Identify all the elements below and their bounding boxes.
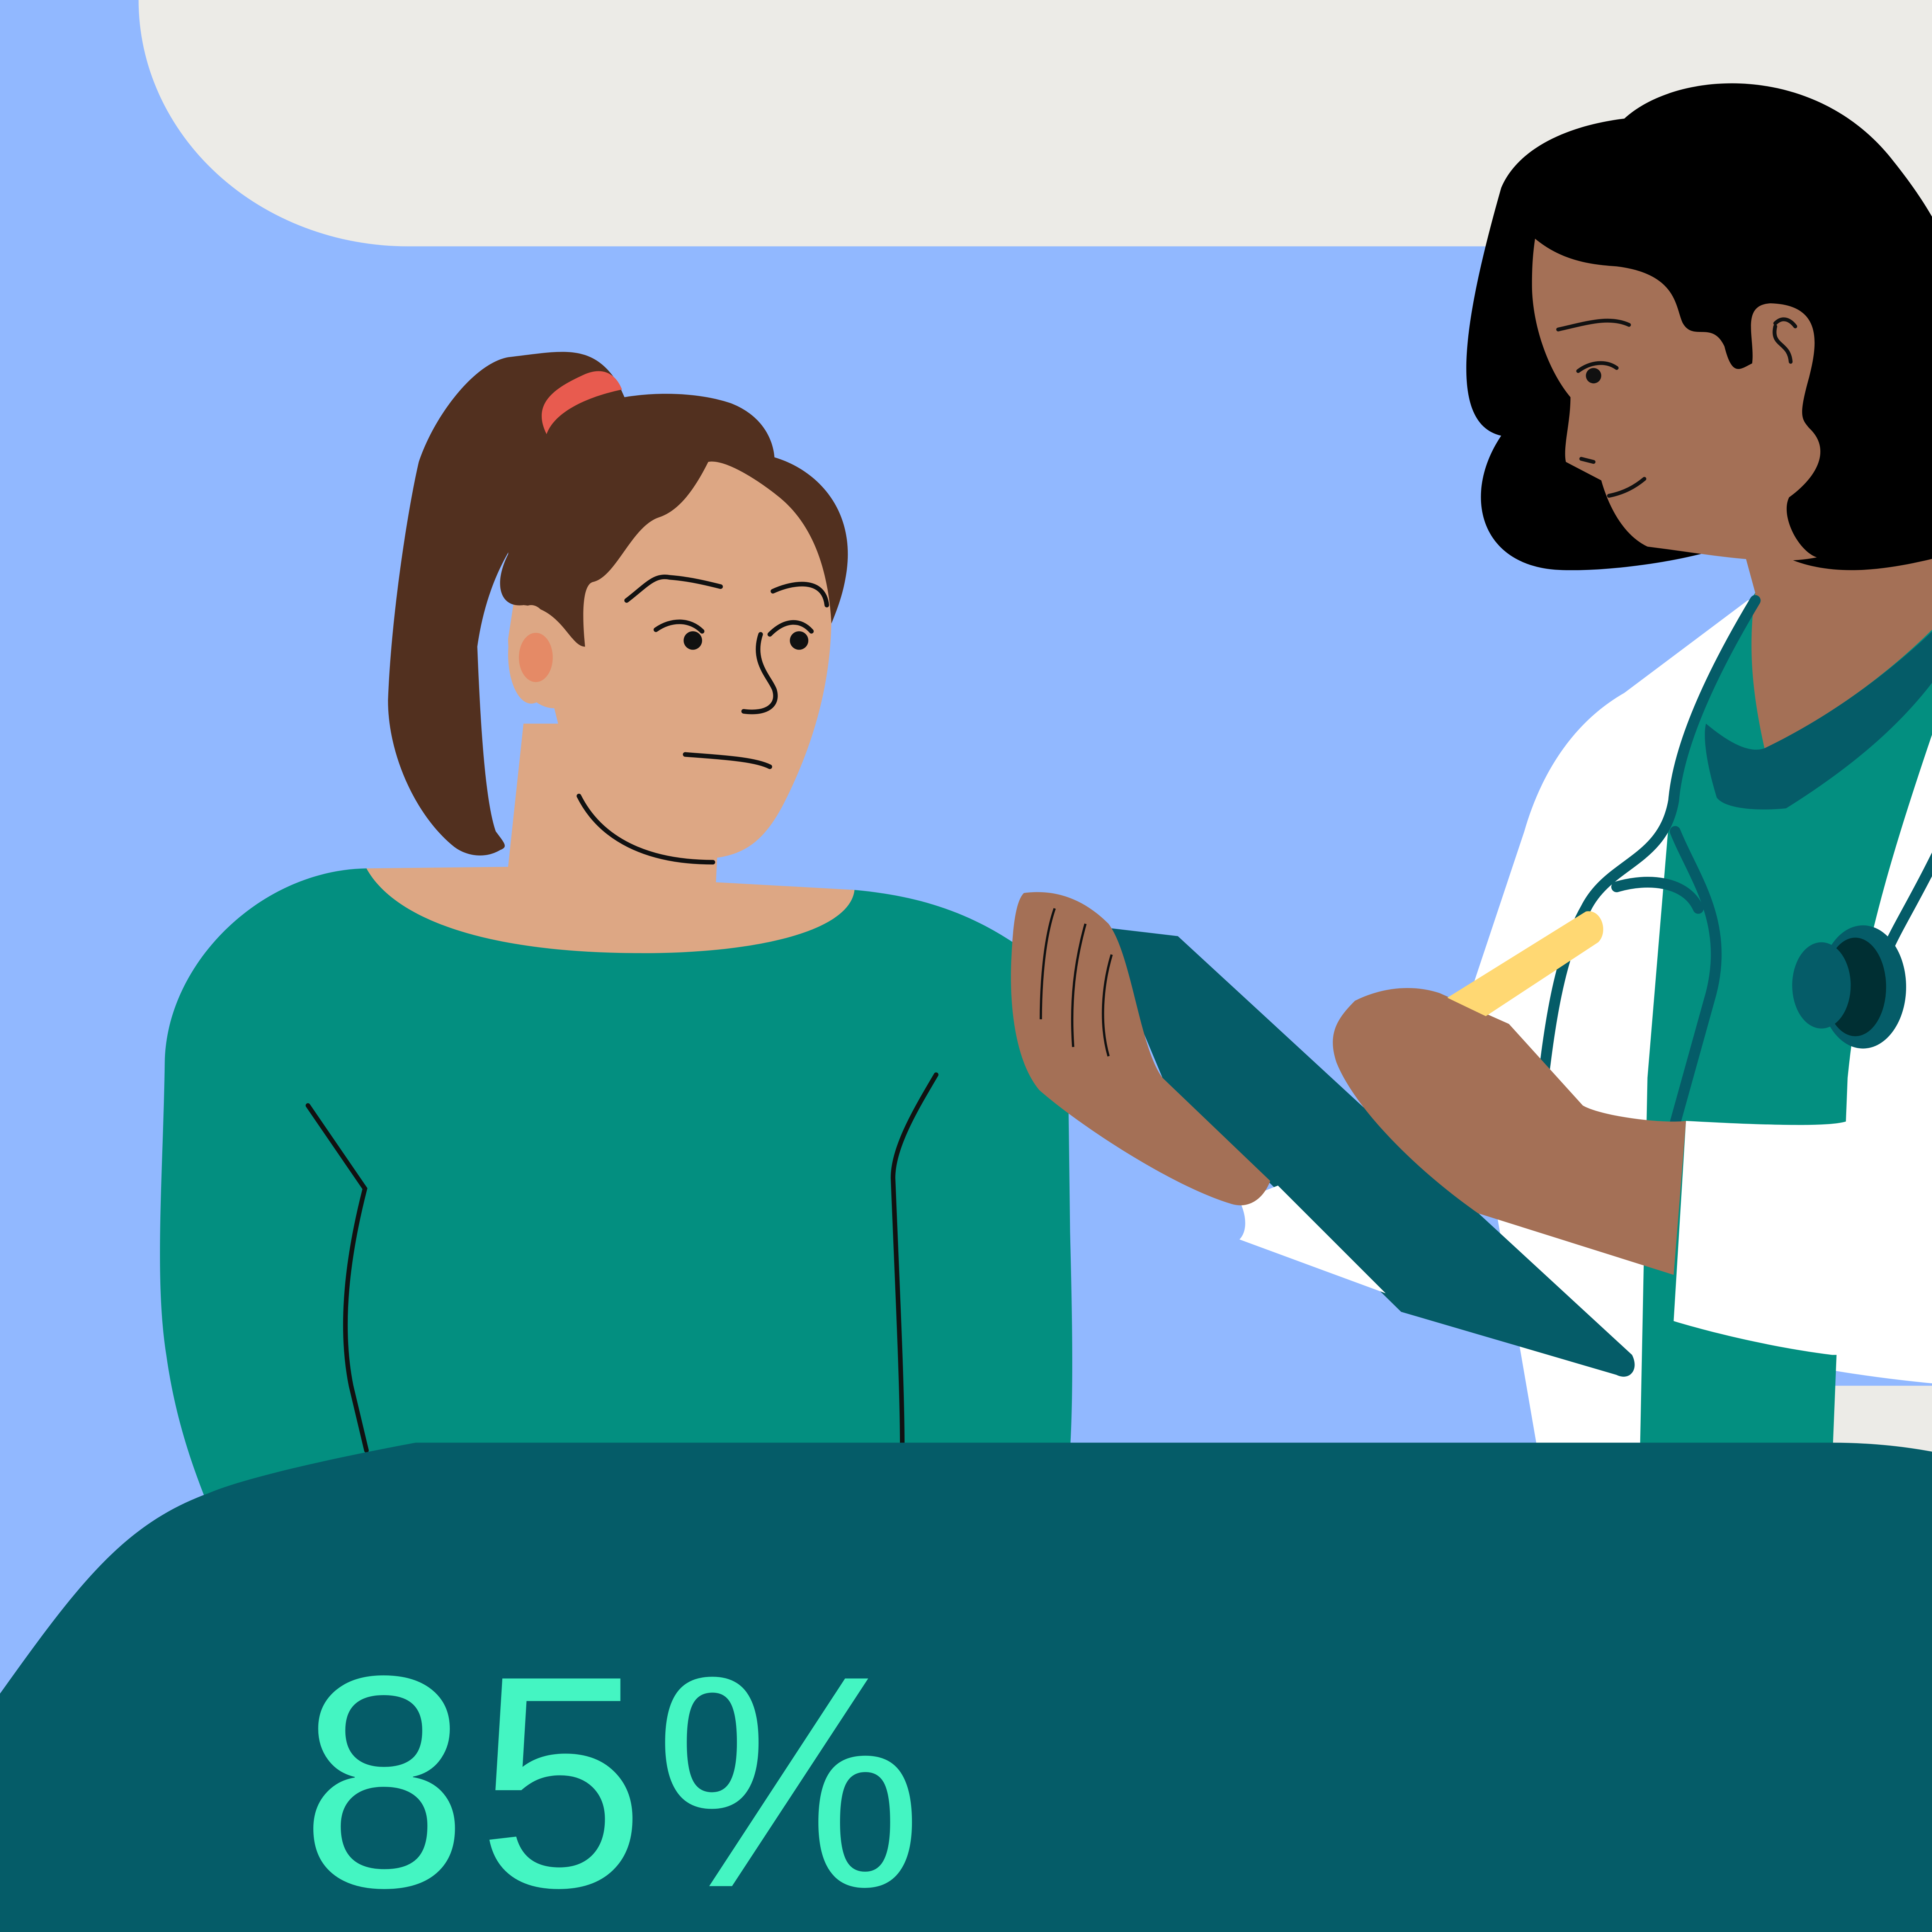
doctor coat back bbox=[1832, 1386, 1932, 1632]
doctor coat bbox=[1463, 554, 1932, 1463]
illustration: patient bbox=[160, 352, 1072, 1524]
patient hair top bbox=[500, 394, 848, 647]
ear bbox=[508, 605, 554, 704]
stethoscope bbox=[1540, 585, 1932, 1139]
clipboard bbox=[1099, 927, 1634, 1377]
doctor right arm sleeve bbox=[1673, 1078, 1932, 1355]
doctor neck bbox=[1732, 508, 1932, 748]
bottom panel bbox=[0, 1443, 1932, 1932]
doctor face bbox=[1532, 239, 1820, 561]
face lines bbox=[308, 577, 936, 1451]
background beige shape bbox=[139, 0, 1932, 531]
pencil bbox=[1447, 911, 1603, 1016]
doctor scrubs bbox=[1640, 577, 1932, 1463]
patient face bbox=[508, 457, 832, 859]
patient neck and collar bbox=[366, 724, 855, 953]
patient sweater bbox=[160, 868, 1072, 1524]
patient hair back bbox=[388, 352, 647, 855]
patient-side sleeve bbox=[1240, 1185, 1386, 1293]
illustration: doctor bbox=[1011, 83, 1932, 1632]
doctor hair bbox=[1466, 83, 1932, 570]
doctor writing arm bbox=[1333, 988, 1686, 1275]
doctor hand holding clipboard bbox=[1011, 892, 1270, 1205]
hair tie bbox=[542, 371, 622, 434]
